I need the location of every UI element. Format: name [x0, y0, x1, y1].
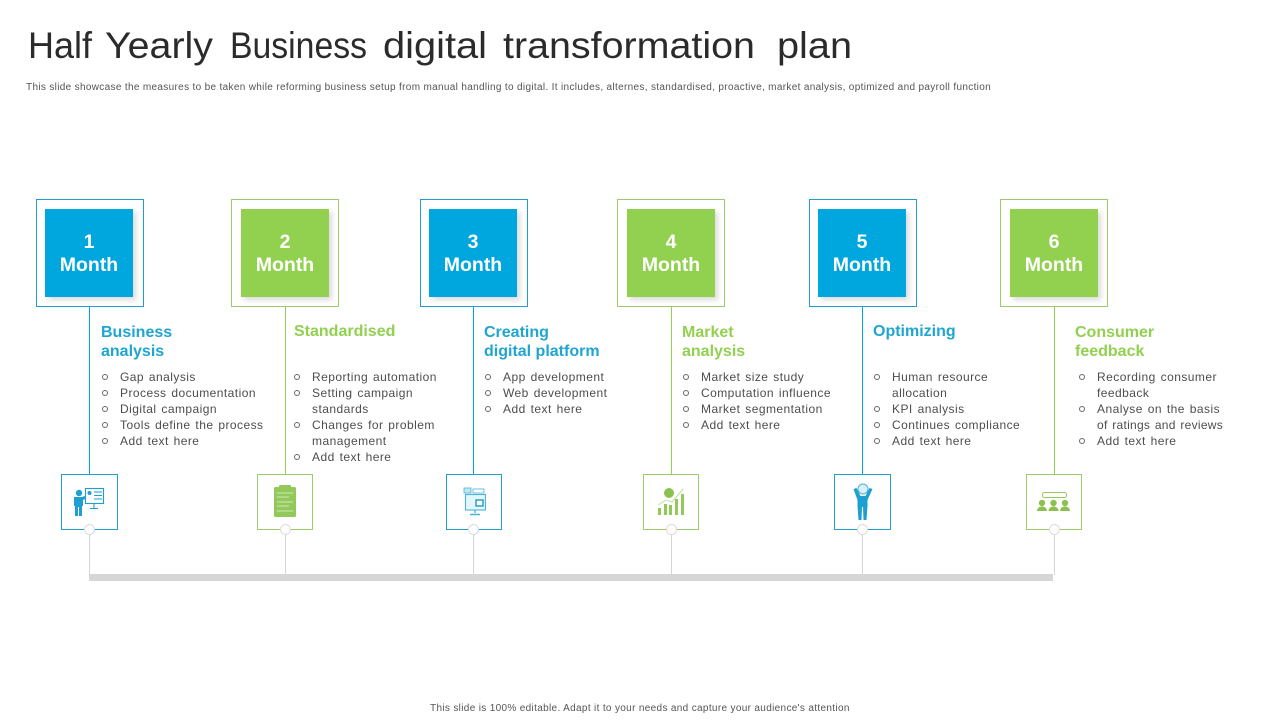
bullet list 1: Add text here	[120, 434, 199, 448]
footer note: This slide is 100% editable. Adapt it to your needs and capture your audience's attention	[430, 703, 850, 714]
bullet list 1: Digital campaign	[120, 402, 217, 416]
bullet list 3: Web development	[503, 386, 607, 400]
bullet list 1: Process documentation	[120, 386, 256, 400]
month badge 3	[420, 199, 528, 307]
heading: business analysis: Business	[101, 324, 172, 341]
title: plan	[777, 25, 852, 66]
bullet list 5: Human resource	[892, 370, 988, 384]
bullet list 6: Analyse on the basis	[1097, 402, 1220, 416]
icon: person raising arms with clock	[834, 474, 891, 530]
bullet list 6: Recording consumer	[1097, 370, 1217, 384]
title: transformation	[503, 25, 755, 66]
bullet list 4: Add text here	[701, 418, 780, 432]
bullet list 2: Reporting automation	[312, 370, 437, 384]
panel: month 1 business analysis	[36, 199, 264, 574]
bullet list 4: Computation influence	[701, 386, 831, 400]
heading: consumer feedback: feedback	[1075, 343, 1144, 360]
bullet list 5: Continues compliance	[892, 418, 1020, 432]
icon: three people with feedback panel	[1026, 474, 1082, 530]
bullet list 2: Setting campaign	[312, 386, 413, 400]
heading: creating digital platform: Creating	[484, 324, 549, 341]
month badge 1: 1	[84, 231, 94, 253]
bullet list 1: Tools define the process	[120, 418, 264, 432]
month badge 2	[231, 199, 339, 307]
month badge 2: 2	[280, 231, 290, 253]
bullet list 3	[485, 370, 607, 416]
month badge 4: 4	[666, 231, 676, 253]
bullet list 6: of ratings and reviews	[1097, 418, 1223, 432]
title: Half	[28, 25, 93, 66]
panel: month 2 standardised	[231, 199, 437, 574]
month badge 4	[617, 199, 725, 307]
month badge 4: Month	[642, 254, 700, 276]
bullet list 2	[294, 370, 437, 464]
bullet list 6: Add text here	[1097, 434, 1176, 448]
bullet list 4: Market size study	[701, 370, 804, 384]
bullet list 3: App development	[503, 370, 604, 384]
title: Yearly	[105, 25, 214, 66]
icon: presenter at board	[61, 474, 118, 530]
month badge 3: 3	[468, 231, 478, 253]
panel: month 3 creating digital platform	[420, 199, 607, 574]
icon: monitor with apps	[446, 474, 502, 530]
month badge 1	[36, 199, 144, 307]
bullet list 2: Changes for problem	[312, 418, 435, 432]
month badge 2: Month	[256, 254, 314, 276]
heading: standardised: Standardised	[294, 323, 395, 340]
month badge 5	[809, 199, 917, 307]
title	[28, 25, 852, 66]
title: Business	[230, 25, 367, 66]
title: digital	[383, 25, 487, 66]
bullet list 2: Add text here	[312, 450, 391, 464]
month badge 6	[1000, 199, 1108, 307]
bullet list 1	[102, 370, 264, 448]
bullet list 6: feedback	[1097, 386, 1149, 400]
panel: month 6 consumer feedback	[1000, 199, 1223, 575]
heading: optimizing: Optimizing	[873, 323, 956, 340]
panel: month 4 market analysis	[617, 199, 831, 574]
timeline base bar	[89, 574, 1053, 581]
heading: creating digital platform	[484, 324, 600, 360]
month badge 1: Month	[60, 254, 118, 276]
bullet list 5: KPI analysis	[892, 402, 965, 416]
bullet list 3: Add text here	[503, 402, 582, 416]
heading: market analysis: Market	[682, 324, 734, 341]
bullet list 2: standards	[312, 402, 369, 416]
heading: business analysis	[101, 324, 172, 360]
heading: consumer feedback	[1075, 324, 1154, 360]
month badge 6: Month	[1025, 254, 1083, 276]
bullet list 5	[874, 370, 1020, 448]
heading: market analysis: analysis	[682, 343, 745, 360]
bullet list 2: management	[312, 434, 387, 448]
heading: consumer feedback: Consumer	[1075, 324, 1154, 341]
bullet list 4	[683, 370, 831, 432]
bullet list 5: Add text here	[892, 434, 971, 448]
heading: creating digital platform: digital platform	[484, 343, 600, 360]
month badge 5: Month	[833, 254, 891, 276]
panel: month 5 optimizing	[809, 199, 1020, 574]
icon: clipboard checklist	[257, 474, 313, 530]
month badge 3: Month	[444, 254, 502, 276]
subtitle description: This slide showcase the measures to be taken while reforming business setup from manual handling to digital. It includes, alternes, standardised, proactive, market analysis, optimized and payroll function	[26, 82, 991, 93]
bullet list 5: allocation	[892, 386, 947, 400]
bullet list 4: Market segmentation	[701, 402, 823, 416]
bullet list 1: Gap analysis	[120, 370, 196, 384]
heading: business analysis: analysis	[101, 343, 164, 360]
icon: growth chart with dollar	[643, 474, 699, 530]
heading: market analysis	[682, 324, 745, 360]
bullet list 6	[1079, 370, 1223, 448]
month badge 6: 6	[1049, 231, 1059, 253]
month badge 5: 5	[857, 231, 867, 253]
